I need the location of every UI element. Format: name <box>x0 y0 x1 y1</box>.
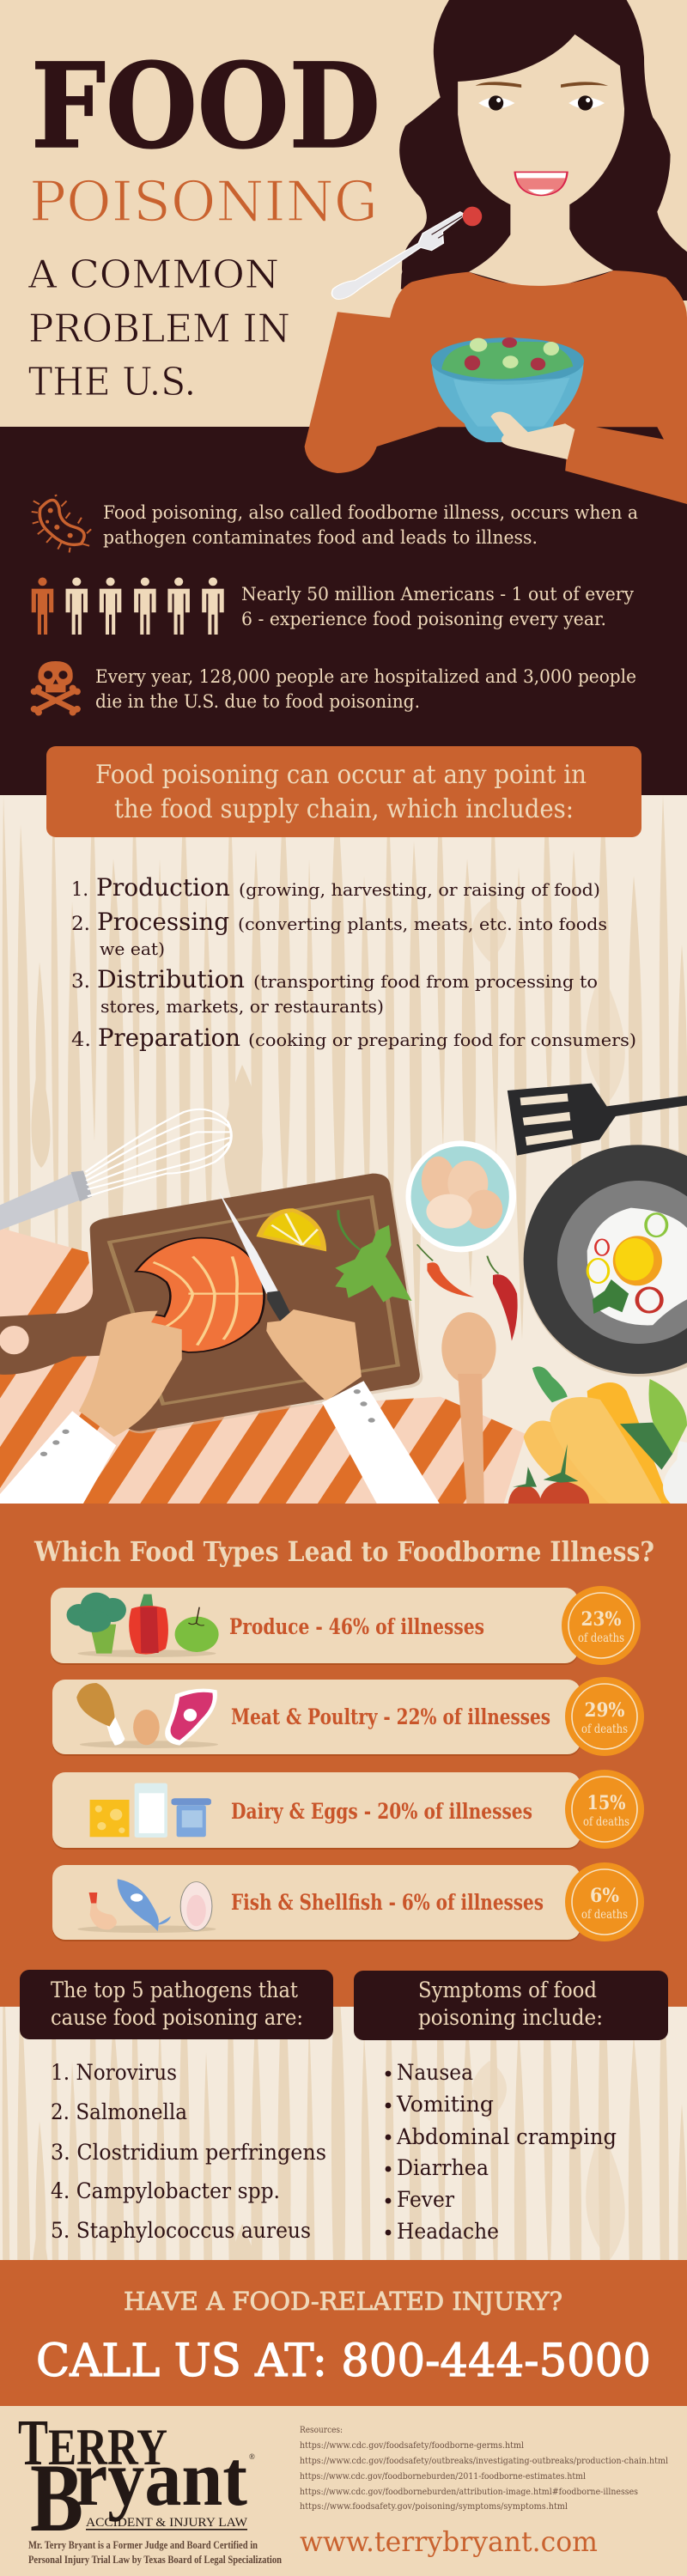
icon: skull and crossbones <box>31 661 81 715</box>
resources list: https://www.cdc.gov/foodborneburden/attribution-image.html#foodborne-illnesses <box>300 2487 638 2497</box>
list: pathogens <box>51 2060 326 2243</box>
bowl of eggs <box>405 1140 516 1252</box>
title: FOOD: FOOD <box>31 38 380 175</box>
icon: six people, one orange <box>32 578 224 635</box>
parsley on board <box>335 1210 412 1303</box>
label: Dairy & Eggs - 20% of illnesses <box>231 1799 532 1824</box>
stage 3: (transporting food from processing to <box>253 971 598 992</box>
whisk <box>0 1109 232 1230</box>
icons: drumstick, egg, steak <box>76 1683 218 1748</box>
resources list: https://www.cdc.gov/foodsafety/foodborne-germs.html <box>300 2440 525 2451</box>
panel: lower wood background <box>0 2007 687 2260</box>
stage 4: (cooking or preparing food for consumers) <box>248 1030 636 1050</box>
heading: top 5 pathogens <box>20 1970 333 2039</box>
right hand <box>266 1309 362 1401</box>
subtitle: A COMMON <box>27 252 279 297</box>
tomato on fork <box>463 207 482 226</box>
panel: dark intro band <box>0 427 687 795</box>
left sleeve <box>0 1411 116 1504</box>
panel: call to action band <box>0 2260 687 2406</box>
heading: symptoms: Symptoms of food <box>418 1978 597 2002</box>
list: symptoms <box>386 2060 617 2244</box>
list: symptoms: Abdominal cramping <box>396 2124 617 2149</box>
firm credentials <box>28 2539 282 2566</box>
spatula <box>508 1084 687 1156</box>
salmon steak <box>136 1238 264 1352</box>
intro text 1 <box>103 502 638 548</box>
stage 1: 1. <box>71 879 88 901</box>
salad bowl <box>431 337 584 442</box>
list: pathogens: 4. Campylobacter spp. <box>51 2178 280 2203</box>
right sleeve <box>322 1381 440 1504</box>
stage 3: Distribution <box>97 965 245 993</box>
heading: symptoms <box>354 1971 668 2040</box>
firm credentials: Personal Injury Trial Law by Texas Board of Legal Specialization <box>28 2554 282 2566</box>
badge: 23% of deaths: 23% <box>581 1608 622 1631</box>
intro text 2: Nearly 50 million Americans - 1 out of every <box>241 584 634 605</box>
stage 1 <box>71 873 600 902</box>
list: symptoms: Diarrhea <box>397 2155 489 2180</box>
subtitle: PROBLEM IN <box>28 306 290 351</box>
mouth <box>514 172 568 196</box>
row: produce <box>51 1586 641 1665</box>
list: symptoms: Headache <box>397 2219 499 2244</box>
badge: 15% of deaths: 15% <box>587 1792 626 1814</box>
stage 3: stores, markets, or restaurants) <box>100 996 384 1017</box>
list: pathogens: 5. Staphylococcus aureus <box>51 2218 311 2243</box>
logo: Terry Bryant <box>18 2407 255 2552</box>
frying pan with egg <box>523 1145 687 1376</box>
list: food supply chain stages <box>71 873 636 1052</box>
subtitle <box>27 252 290 404</box>
logo: Terry Bryant: ERRY <box>48 2419 167 2476</box>
stage 3 <box>71 965 598 1017</box>
illustration: cooking scene <box>0 1084 687 1505</box>
logo: Terry Bryant: T <box>18 2407 48 2479</box>
heading: top 5 pathogens: cause food poisoning are: <box>51 2005 303 2030</box>
badge: 15% of deaths <box>565 1770 644 1849</box>
face and neck <box>458 34 624 292</box>
wooden spoon <box>441 1312 496 1504</box>
row: meat and poultry <box>52 1677 644 1756</box>
list: pathogens: 1. Norovirus <box>51 2060 177 2085</box>
icons: cheese, milk, yogurt <box>90 1783 211 1838</box>
label: Meat & Poultry - 22% of illnesses <box>231 1704 550 1729</box>
list: pathogens: 3. Clostridium perfringens <box>51 2140 326 2165</box>
stage 4 <box>71 1024 636 1052</box>
intro text 3 <box>95 666 636 712</box>
firm credentials: Mr. Terry Bryant is a Former Judge and Board Certified in <box>28 2539 258 2551</box>
intro text 2: 6 - experience food poisoning every year. <box>241 609 606 629</box>
striped tablecloth <box>0 1229 526 1504</box>
badge: 29% of deaths: 29% <box>584 1699 625 1722</box>
intro text 3: Every year, 128,000 people are hospitalized and 3,000 people <box>95 666 636 687</box>
eyebrows <box>476 82 608 88</box>
heading: symptoms: poisoning include: <box>418 2005 603 2030</box>
logo: Terry Bryant: ® <box>249 2452 255 2461</box>
hand on fork <box>336 253 402 316</box>
call to action heading: HAVE A FOOD-RELATED INJURY? <box>124 2287 562 2316</box>
resources list <box>300 2425 669 2512</box>
stage 3: 3. <box>71 971 90 993</box>
icons: broccoli, pepper, apple <box>67 1593 219 1657</box>
stage 4: Preparation <box>98 1024 240 1052</box>
stage 1: (growing, harvesting, or raising of food) <box>239 879 600 900</box>
intro text 1: Food poisoning, also called foodborne illness, occurs when a <box>103 502 638 523</box>
label: Produce - 46% of illnesses <box>229 1614 484 1639</box>
hand holding bowl <box>490 411 575 459</box>
resources list: Resources: <box>300 2425 343 2435</box>
panel: wood table background <box>0 795 687 1504</box>
chili peppers <box>417 1244 518 1341</box>
icons: shrimp, fish, fillet <box>77 1879 216 1933</box>
call to action phone number: CALL US AT: 800-444-5000 <box>36 2336 651 2387</box>
badge: 6% of deaths: 6% <box>590 1885 619 1907</box>
lemon wedge <box>256 1208 326 1251</box>
gap between arm and body <box>596 427 664 440</box>
callout: supply chain: the food supply chain, which includes: <box>114 794 574 824</box>
hair <box>399 0 687 301</box>
label: Fish & Shellfish - 6% of illnesses <box>231 1890 544 1915</box>
badge: 23% of deaths <box>562 1586 641 1665</box>
stage 2: Processing <box>97 908 229 936</box>
intro text 2 <box>241 584 634 629</box>
left hand <box>79 1311 182 1437</box>
intro text 1: pathogen contaminates food and leads to illness. <box>103 527 538 548</box>
row: dairy and eggs <box>52 1770 644 1850</box>
logo: Terry Bryant: ryant <box>75 2434 247 2522</box>
knife <box>218 1191 303 1344</box>
badge: 29% of deaths: of deaths <box>581 1722 628 1736</box>
fork <box>331 212 466 299</box>
panel: orange food types background <box>0 1504 687 2007</box>
stage 1: Production <box>96 873 230 902</box>
stage 4: 4. <box>71 1030 91 1051</box>
row: fish and shellfish <box>52 1862 644 1941</box>
stage 2: (converting plants, meats, etc. into foods <box>238 914 607 934</box>
eyes <box>478 95 605 111</box>
subtitle: THE U.S. <box>28 359 196 404</box>
sweater <box>305 270 687 504</box>
badge: 6% of deaths <box>565 1862 644 1941</box>
stage 2: 2. <box>71 914 90 935</box>
badge: 29% of deaths <box>565 1677 644 1756</box>
website: www.terrybryant.com <box>300 2525 598 2558</box>
badge: 15% of deaths: of deaths <box>583 1815 629 1829</box>
resources list: https://www.cdc.gov/foodborneburden/2011-foodborne-estimates.html <box>300 2471 587 2482</box>
logo: Terry Bryant: B <box>30 2445 83 2552</box>
list: symptoms: Nausea <box>397 2060 473 2085</box>
logo: Terry Bryant: ACCIDENT & INJURY LAW <box>86 2516 248 2530</box>
yellow peppers and vegetables <box>508 1366 687 1504</box>
stage 2: we eat) <box>100 939 165 959</box>
heading: top 5 pathogens: The top 5 pathogens that <box>51 1978 298 2002</box>
stage 2 <box>71 908 607 959</box>
callout: supply chain: Food poisoning can occur at any point in <box>95 760 587 790</box>
list: symptoms: Fever <box>397 2187 454 2212</box>
resources list: https://www.foodsafety.gov/poisoning/symptoms/symptoms.html <box>300 2501 568 2512</box>
callout: supply chain <box>46 746 641 837</box>
cutting board <box>0 1174 423 1433</box>
badge: 6% of deaths: of deaths <box>581 1908 628 1922</box>
badge: 23% of deaths: of deaths <box>578 1631 624 1645</box>
list: symptoms: Vomiting <box>396 2092 494 2117</box>
title: POISONING: POISONING <box>29 170 378 234</box>
list: pathogens: 2. Salmonella <box>51 2099 187 2124</box>
intro text 3: die in the U.S. due to food poisoning. <box>95 691 420 712</box>
illustration: woman eating salad <box>305 0 687 504</box>
icon: bacterium <box>32 495 91 552</box>
